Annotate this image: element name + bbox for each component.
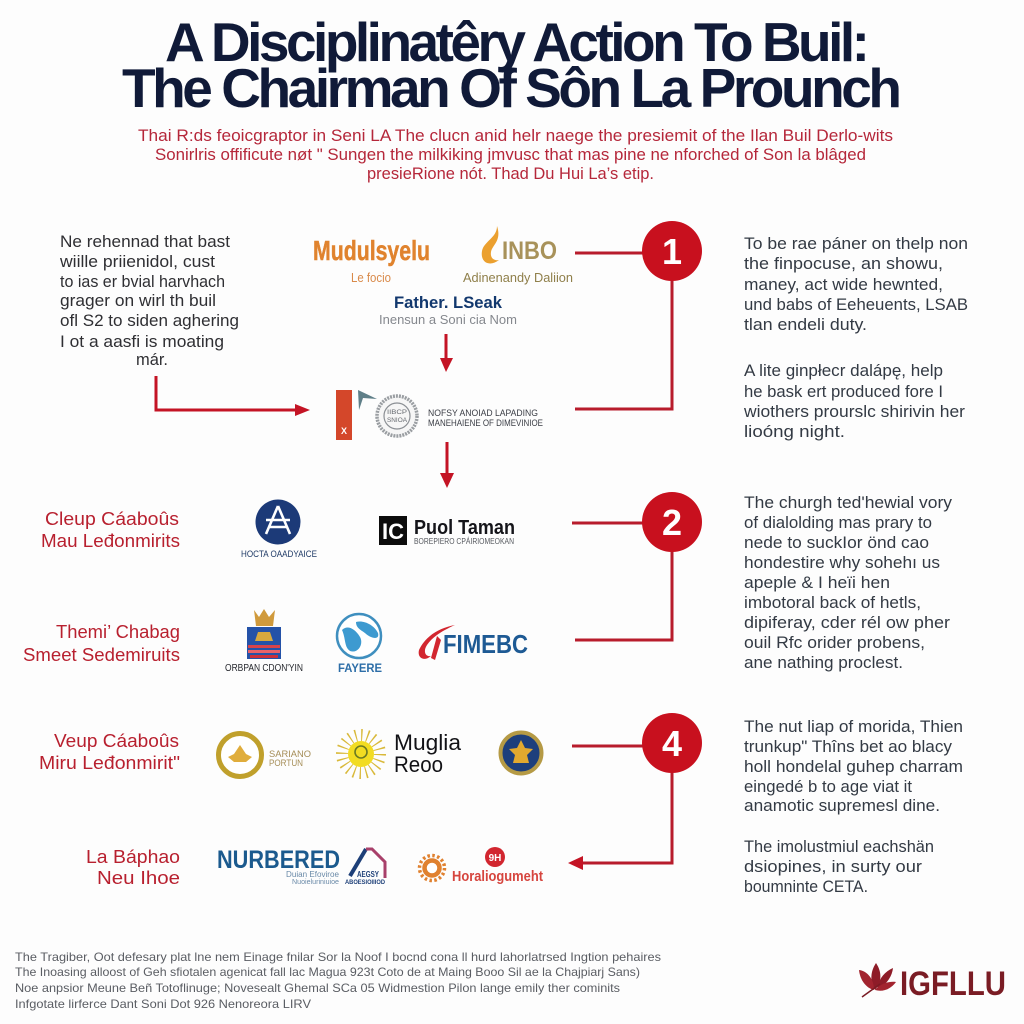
- right text block 2: wiothers prourslc shirivin her: [743, 402, 965, 421]
- logo: Father LSeak: Inensun a Soni cia Nom: [379, 312, 517, 327]
- logo: Mudulsyelu: Le focio: [351, 270, 391, 285]
- logo: globe FAYERE: FAYERE: [338, 661, 382, 675]
- red label: Veup Cáaboûs: [39, 731, 180, 773]
- number badge 1: [642, 221, 702, 281]
- right text block 4: trunkup" Thîns bet ao blacy: [744, 737, 953, 756]
- logo: Father LSeak: [379, 293, 517, 327]
- logo: Mudulsyelu: [313, 235, 430, 285]
- right text block 3: hondestire why sohehı us: [744, 553, 940, 572]
- right text block 1: To be rae páner on thelp non: [744, 234, 968, 253]
- red label: Cleup Cáaboûs: [41, 509, 180, 551]
- right text block 2: [743, 361, 965, 441]
- red label: La Báphao: Neu Ihoe: [97, 868, 180, 888]
- red label: Veup Cáaboûs: Veup Cáaboûs: [54, 731, 179, 751]
- right text block 1: und babs of Eeheuents, LSAB: [744, 295, 968, 314]
- logo: gold seal: SARIANO: [269, 749, 311, 759]
- logo: NURBERED: Duian Efoviroe: [286, 870, 340, 879]
- footer text: Noe anpsior Meune Beñ Totoflinuge; Novesealt Ghemal SCa 05 Widmestion Pilon lange emily ther cominits: [15, 981, 620, 995]
- right text block 1: tlan endeli duty.: [744, 315, 867, 334]
- logo: Horaliogumeht: 9H: [489, 853, 501, 864]
- right text block 3: ane nathing proclest.: [744, 653, 903, 672]
- left intro text: ofl S2 to siden aghering: [60, 311, 239, 330]
- logo: seal row: X: [341, 426, 347, 436]
- right text block 4: holl hondelal guhep charram: [744, 757, 963, 776]
- logo: sun Muglia Reoo: Muglia: [394, 730, 462, 755]
- right text block 1: maney, act wide hewnted,: [744, 275, 943, 294]
- number badge 4: 4: [662, 723, 682, 764]
- red label: Veup Cáaboûs: Miru Leđonmirit": [39, 753, 180, 773]
- right text block 3: dipiferay, cder rél ow pher: [744, 613, 950, 632]
- left intro text: [59, 232, 239, 369]
- footer text: The Inoasing alloost of Geh sfiotalen agenicat fall lac Magua 923t Coto de at Maing Booo Sil ae la Chajpiarj Sans): [15, 965, 640, 979]
- logo: crown shield: ORBPAN CDON'YIN: [225, 663, 303, 674]
- right text block 5: [744, 837, 934, 896]
- logo: Mudulsyelu: Mudulsyelu: [313, 235, 430, 266]
- logo: Puol Taman: [379, 516, 515, 546]
- logo: NURBERED: AEGSY: [357, 870, 380, 879]
- logo: Horaliogumeht: Horaliogumeht: [452, 868, 543, 885]
- right text block 4: The nut liap of morida, Thien: [744, 717, 963, 736]
- logo: sun Muglia Reoo: Reoo: [394, 752, 443, 777]
- right text block 4: [744, 717, 963, 815]
- logo: navy circle: [241, 500, 317, 560]
- logo: Puol Taman: BOREPIERO CPÁIRIOMEOKAN: [414, 537, 514, 546]
- logo: INBO: Adinenandy Daliion: [463, 270, 573, 285]
- red label: Cleup Cáaboûs: Cleup Cáaboûs: [45, 509, 179, 529]
- footer text: The Tragiber, Oot defesary plat lne nem Einage fnilar Sor la Noof I bocnd cona ll hurd lahorlatrsed Ingtion pehaires: [15, 950, 661, 964]
- logo: Father LSeak: Father. LSeak: [394, 293, 503, 312]
- logo: seal row: MANEHAIENE OF DIMEVINIOE: [428, 418, 543, 429]
- logo: NURBERED: [217, 846, 386, 886]
- brand logo: IGFLLU: IGFLLU: [900, 965, 1006, 1003]
- logo: seal row: NOFSY ANOIAD LAPADING: [428, 408, 538, 419]
- left intro text: I ot a aasfi is moating: [60, 332, 224, 351]
- right text block 2: A lite ginpłecr dalápę, help: [744, 361, 943, 380]
- logo: INBO: INBO: [502, 237, 557, 265]
- right text block 1: [744, 234, 968, 334]
- left intro text: grager on wirl th buil: [60, 291, 216, 310]
- logo: FIMEBC: [419, 625, 528, 660]
- right text block 3: imbotoral back of hetls,: [744, 593, 921, 612]
- right text block 3: [744, 493, 953, 672]
- subtitle: Sonirlris offificute nøt " Sungen the milkiking jmvusc that mas pine ne nforched of Son la blâged: [155, 146, 866, 164]
- right text block 3: apeple & I heïi hen: [744, 573, 890, 592]
- arrow: down to seal row: [440, 334, 453, 372]
- title: The Chairman Of Sôn La Prounch: [122, 57, 902, 119]
- right text block 5: boumninte CETA.: [744, 877, 868, 896]
- logo: Puol Taman: Puol Taman: [414, 517, 515, 539]
- logo: gold seal: PORTUN: [269, 758, 303, 768]
- subtitle: presieRione nót. Thad Du Hui La’s etip.: [367, 165, 654, 183]
- right text block 3: of dialolding mas prary to: [744, 513, 932, 532]
- left intro text: már.: [136, 350, 168, 369]
- right text block 5: dsiopines, in surty our: [744, 857, 922, 876]
- logo: Puol Taman: IC: [382, 519, 404, 544]
- right text block 3: nede to suckIor önd cao: [744, 533, 929, 552]
- left intro text: Ne rehennad that bast: [60, 232, 230, 251]
- red label: Themi Chabag: [23, 622, 180, 665]
- number badge 1: 1: [662, 231, 682, 272]
- logo: NURBERED: Nuoieluriniuioe: [292, 879, 339, 886]
- red label: Themi Chabag: Themi’ Chabag: [56, 622, 180, 642]
- red label: La Báphao: La Báphao: [86, 847, 180, 867]
- right text block 1: the finpocuse, an showu,: [744, 254, 943, 273]
- left intro text: to ias er bvial harvhach: [60, 272, 225, 291]
- red label: La Báphao: [86, 847, 180, 888]
- connector 1: [575, 253, 672, 409]
- logo: NURBERED: NURBERED: [217, 846, 340, 874]
- logo: crown shield: [225, 609, 303, 674]
- red label: Themi Chabag: Smeet Sedemiruits: [23, 645, 180, 665]
- number badge 2: [642, 492, 702, 552]
- brand logo: IGFLLU: [859, 963, 1006, 1003]
- red label: Cleup Cáaboûs: Mau Leđonmirits: [41, 531, 180, 551]
- right text block 4: anamotic supremesl dine.: [744, 796, 940, 815]
- right text block 3: The churgh ted'hewial vory: [744, 493, 953, 512]
- logo: navy circle: HOCTA OAADYAICE: [241, 549, 317, 560]
- logo: sun Muglia Reoo: [342, 730, 462, 777]
- footer text: [15, 950, 661, 1011]
- footer text: Infgotate lirferce Dant Soni Dot 926 Nenoreora LIRV: [15, 997, 311, 1011]
- arrow: left text to seal row: [156, 376, 310, 416]
- logo: NURBERED: ABOESIOIIIOD: [345, 880, 386, 886]
- right text block 4: eingedé b to age viat it: [744, 777, 912, 796]
- logo: seal row: SNIOA: [387, 418, 407, 424]
- logo: INBO: [463, 226, 573, 285]
- right text block 2: he bask ert produced fore I: [744, 382, 943, 401]
- left intro text: wiille priienidol, cust: [59, 252, 215, 271]
- logo: seal row: [336, 390, 543, 440]
- right text block 2: lioóng night.: [744, 422, 845, 441]
- logo: globe FAYERE: [337, 614, 382, 675]
- right text block 3: ouil Rfc orider probens,: [744, 633, 925, 652]
- connector 4: [568, 746, 672, 870]
- arrow: down from seal row: [440, 442, 454, 488]
- logo: seal row: IIBCP: [387, 410, 407, 416]
- subtitle: [138, 127, 893, 183]
- subtitle: Thai R:ds feoicgraptor in Seni LA The clucn anid helr naege the presiemit of the Ilan Buil Derlo-wits: [138, 127, 893, 145]
- logo: navy gold badge: [500, 732, 542, 774]
- logo: gold seal: [218, 734, 311, 776]
- right text block 5: The imolustmiul eachshän: [744, 837, 934, 856]
- logo: Horaliogumeht: [420, 847, 543, 885]
- title: A Disciplinatêry Action To Buil:: [165, 11, 870, 73]
- logo: FIMEBC: FIMEBC: [443, 629, 528, 659]
- title: [122, 11, 902, 119]
- number badge 2: 2: [662, 502, 682, 543]
- connector 2: [572, 523, 672, 640]
- number badge 4: [642, 713, 702, 773]
